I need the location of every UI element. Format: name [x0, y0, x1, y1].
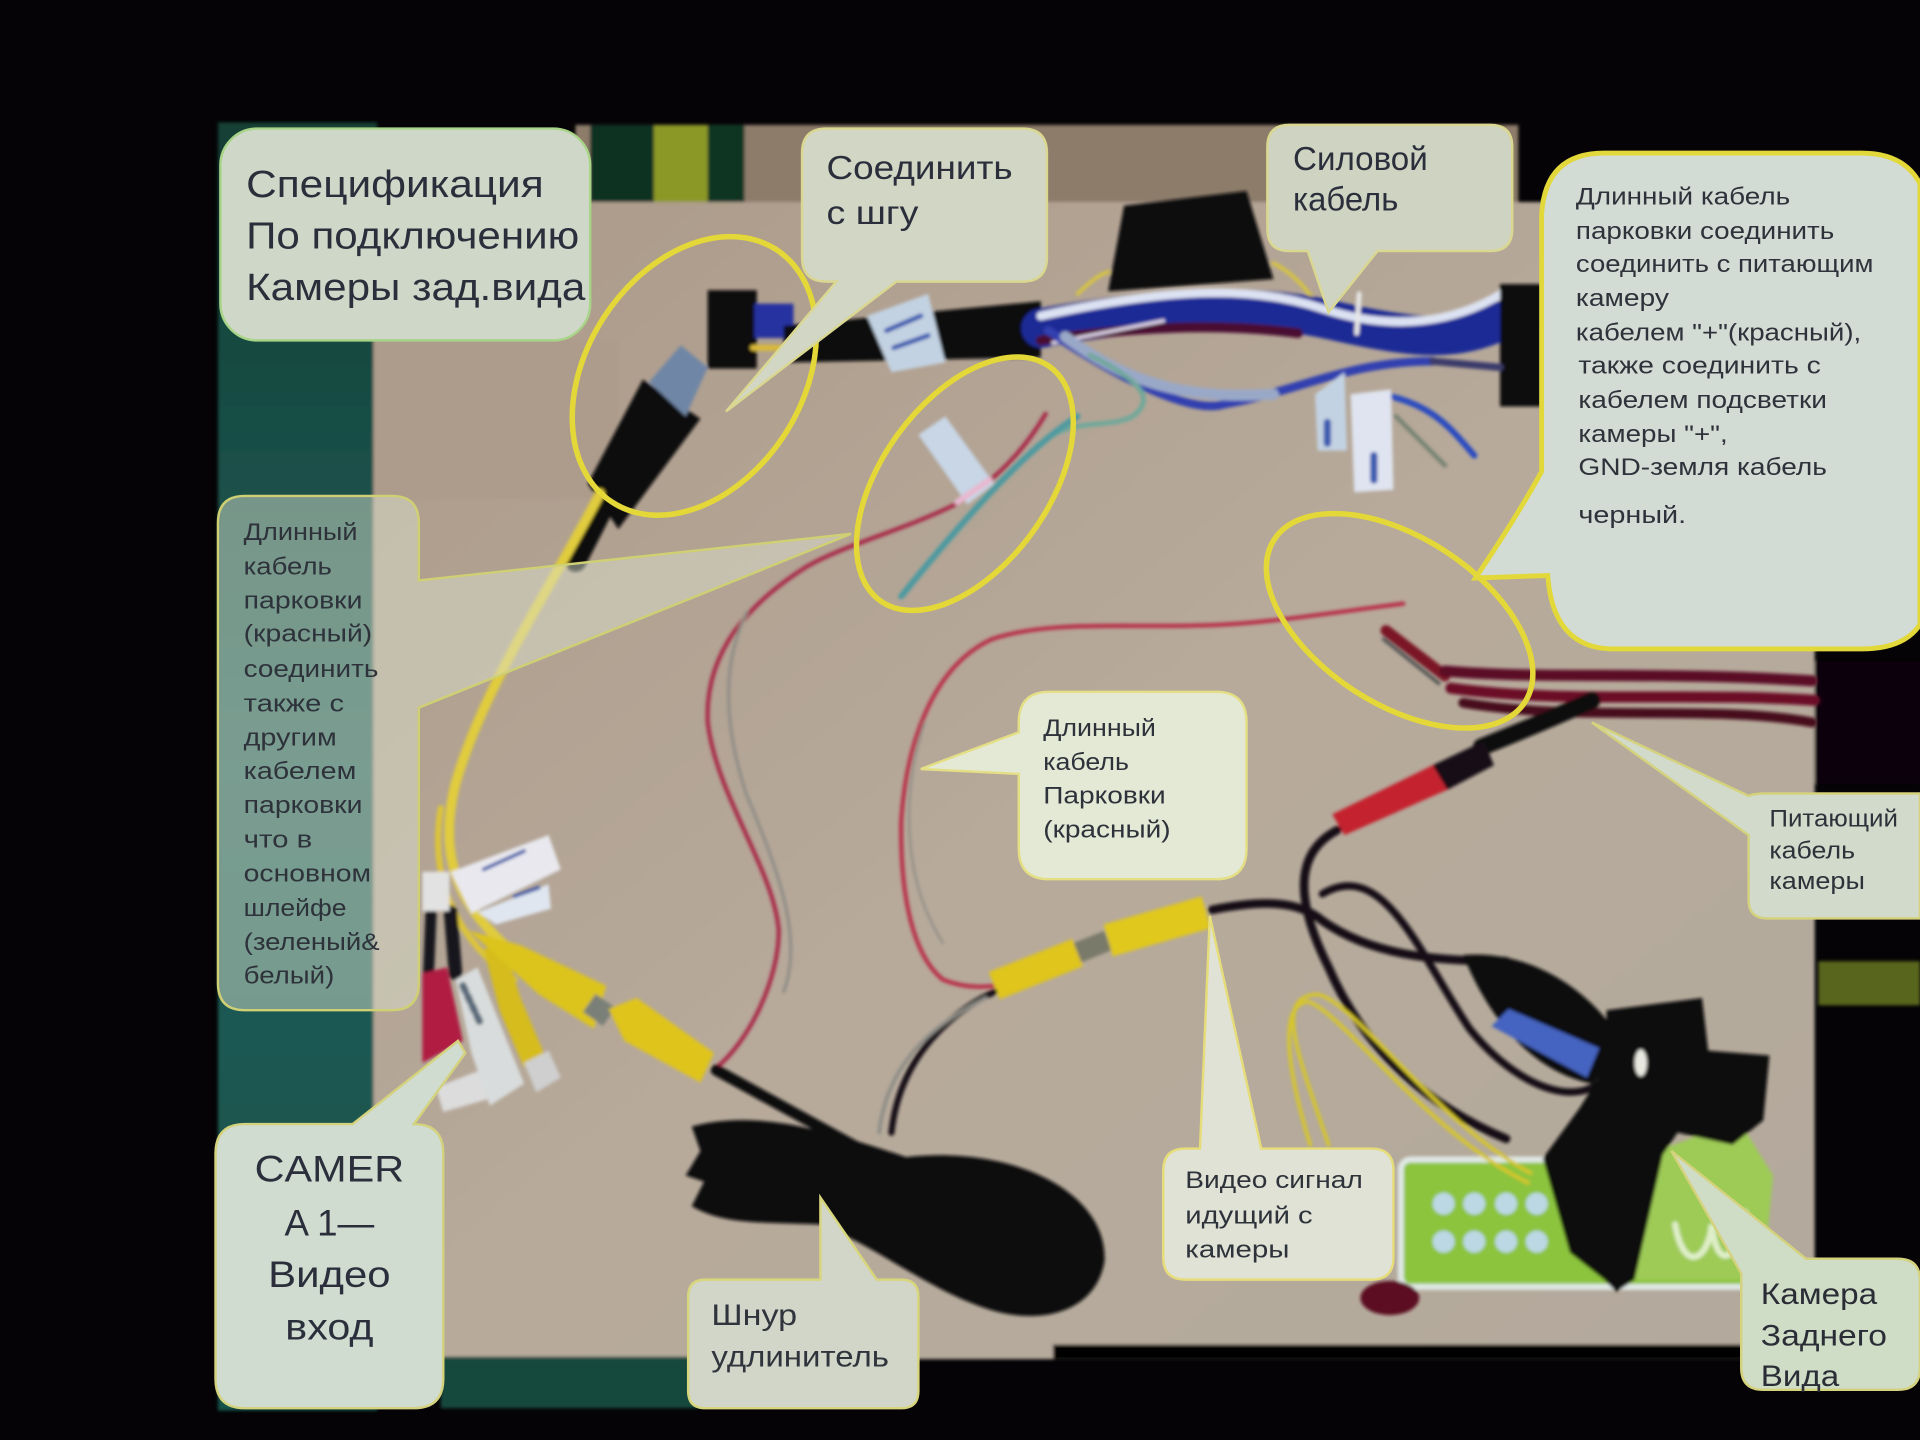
callout: power cable: [1267, 125, 1512, 312]
yellow highlight circles: [522, 191, 1570, 772]
callout: camera power cable: [1592, 722, 1920, 918]
callout: long parking cable instructions: кабелем "+"(красный),: [1576, 319, 1861, 346]
callout: long parking cable on the left: основном: [244, 861, 371, 888]
callout: extension cord: [688, 1198, 918, 1408]
callout: camera 1 video input: вход: [285, 1307, 373, 1348]
harness: ISO plug and sleeve: [576, 290, 1041, 561]
callout: long parking cable red: Парковки: [1043, 782, 1166, 809]
callout: long parking cable instructions: камеру: [1576, 285, 1670, 312]
callout: rear view camera: [1671, 1151, 1920, 1393]
callout: rear view camera: Вида: [1761, 1360, 1840, 1393]
callout: power cable: кабель: [1293, 182, 1398, 219]
callout: camera power cable: Питающий: [1769, 806, 1898, 833]
callout: long parking cable red: (красный): [1043, 817, 1171, 844]
callout: long parking cable instructions: также соединить с: [1578, 352, 1821, 379]
red connector under callout: [1360, 1281, 1419, 1315]
camera tagged blue sticker: [1491, 1009, 1599, 1078]
callout: rear view camera: Камера: [1761, 1278, 1878, 1311]
white cable tags: [422, 835, 561, 924]
callout: extension cord: Шнур: [711, 1299, 797, 1332]
circle: parking wire tags: [813, 318, 1117, 650]
callout: camera power cable: камеры: [1769, 868, 1865, 895]
circle: head-unit connector: [522, 191, 867, 561]
callout: long parking cable instructions: соединить с питающим: [1576, 251, 1873, 278]
callout: long parking cable instructions: GND-земля кабель: [1578, 454, 1827, 481]
callout: video signal from camera: Видео сигнал: [1185, 1167, 1363, 1194]
callout: long parking cable instructions: Длинный кабель: [1576, 183, 1790, 210]
rear view camera: [1543, 998, 1769, 1292]
callout: title specification: Спецификация: [246, 164, 544, 206]
callout: long parking cable on the left: другим: [244, 725, 337, 752]
callout: long parking cable instructions: камеры "+",: [1578, 421, 1728, 448]
photo of the wiring kit: [218, 122, 1920, 1411]
callout: title specification: Камеры зад.вида: [246, 267, 586, 309]
callout: long parking cable on the left: парковки: [244, 588, 362, 615]
callout: long parking cable red: Длинный: [1043, 715, 1156, 742]
callout: title specification: По подключению: [246, 216, 579, 258]
callout: video signal from camera: идущий с: [1185, 1202, 1313, 1229]
callout: long parking cable instructions: [1476, 153, 1920, 649]
callout: long parking cable instructions: парковки соединить: [1576, 218, 1834, 245]
tagged teal and red wires: [708, 414, 1078, 1068]
yellow camera wires: [1289, 994, 1531, 1183]
callout: title specification: [220, 129, 590, 340]
callout: long parking cable on the left: также с: [244, 690, 344, 717]
callout: long parking cable instructions: черный.: [1578, 502, 1686, 529]
yellow video cable from harness: [429, 493, 600, 980]
RCA plugs cluster: [422, 931, 714, 1112]
callout: connect to head unit: [726, 129, 1047, 411]
callout: long parking cable on the left: белый): [244, 962, 334, 989]
callout: long parking cable on the left: Длинный: [244, 519, 358, 546]
harness: fuse box and bundle: [1041, 191, 1542, 407]
backdrop: box and green packaging: [218, 122, 1920, 1411]
yellow RCA video plug: [879, 912, 1206, 1133]
callout: long parking cable on the left: кабелем: [244, 758, 356, 785]
callout: long parking cable on the left: (зеленый&: [244, 929, 380, 956]
callout: long parking cable on the left: кабель: [244, 553, 332, 580]
wires and cables: [422, 191, 1815, 1316]
callout: long parking cable instructions: кабелем подсветки: [1578, 387, 1827, 414]
lower blue wires with tags: [1048, 331, 1500, 492]
callout: camera 1 video input: [216, 1041, 465, 1408]
callout: extension cord: удлинитель: [711, 1341, 889, 1374]
callout: connect to head unit: с шгу: [827, 195, 919, 232]
callout: connect to head unit: Соединить: [827, 150, 1013, 187]
callout: long parking cable red: кабель: [1043, 749, 1129, 776]
long red parking wire: [901, 604, 1403, 987]
black camera cables: [1212, 830, 1629, 1139]
green packaging card: [1401, 1120, 1773, 1287]
callout: camera power cable: кабель: [1769, 837, 1855, 864]
callout: long parking cable on the left: что в: [244, 826, 312, 853]
camera power cable: [1332, 631, 1815, 835]
callout: camera 1 video input: A 1—: [284, 1203, 375, 1244]
callout: power cable: Силовой: [1293, 141, 1428, 178]
callout: rear view camera: Заднего: [1761, 1320, 1887, 1353]
callout: long parking cable on the left: (красный): [244, 621, 372, 648]
callout: camera 1 video input: CAMER: [255, 1149, 404, 1190]
callout: long parking cable on the left: шлейфе: [244, 895, 347, 922]
callout: long parking cable on the left: соединить: [244, 656, 378, 683]
callout: long parking cable on the left: парковки: [244, 792, 362, 819]
callout: long parking cable red: [921, 692, 1247, 879]
callout: long parking cable on the left: [218, 496, 851, 1010]
callout: camera 1 video input: Видео: [268, 1254, 391, 1295]
callout: video signal from camera: [1163, 916, 1393, 1280]
extension cord coil: [686, 1070, 1105, 1316]
callout: video signal from camera: камеры: [1185, 1237, 1289, 1264]
circle: power wire ends: [1229, 470, 1570, 772]
